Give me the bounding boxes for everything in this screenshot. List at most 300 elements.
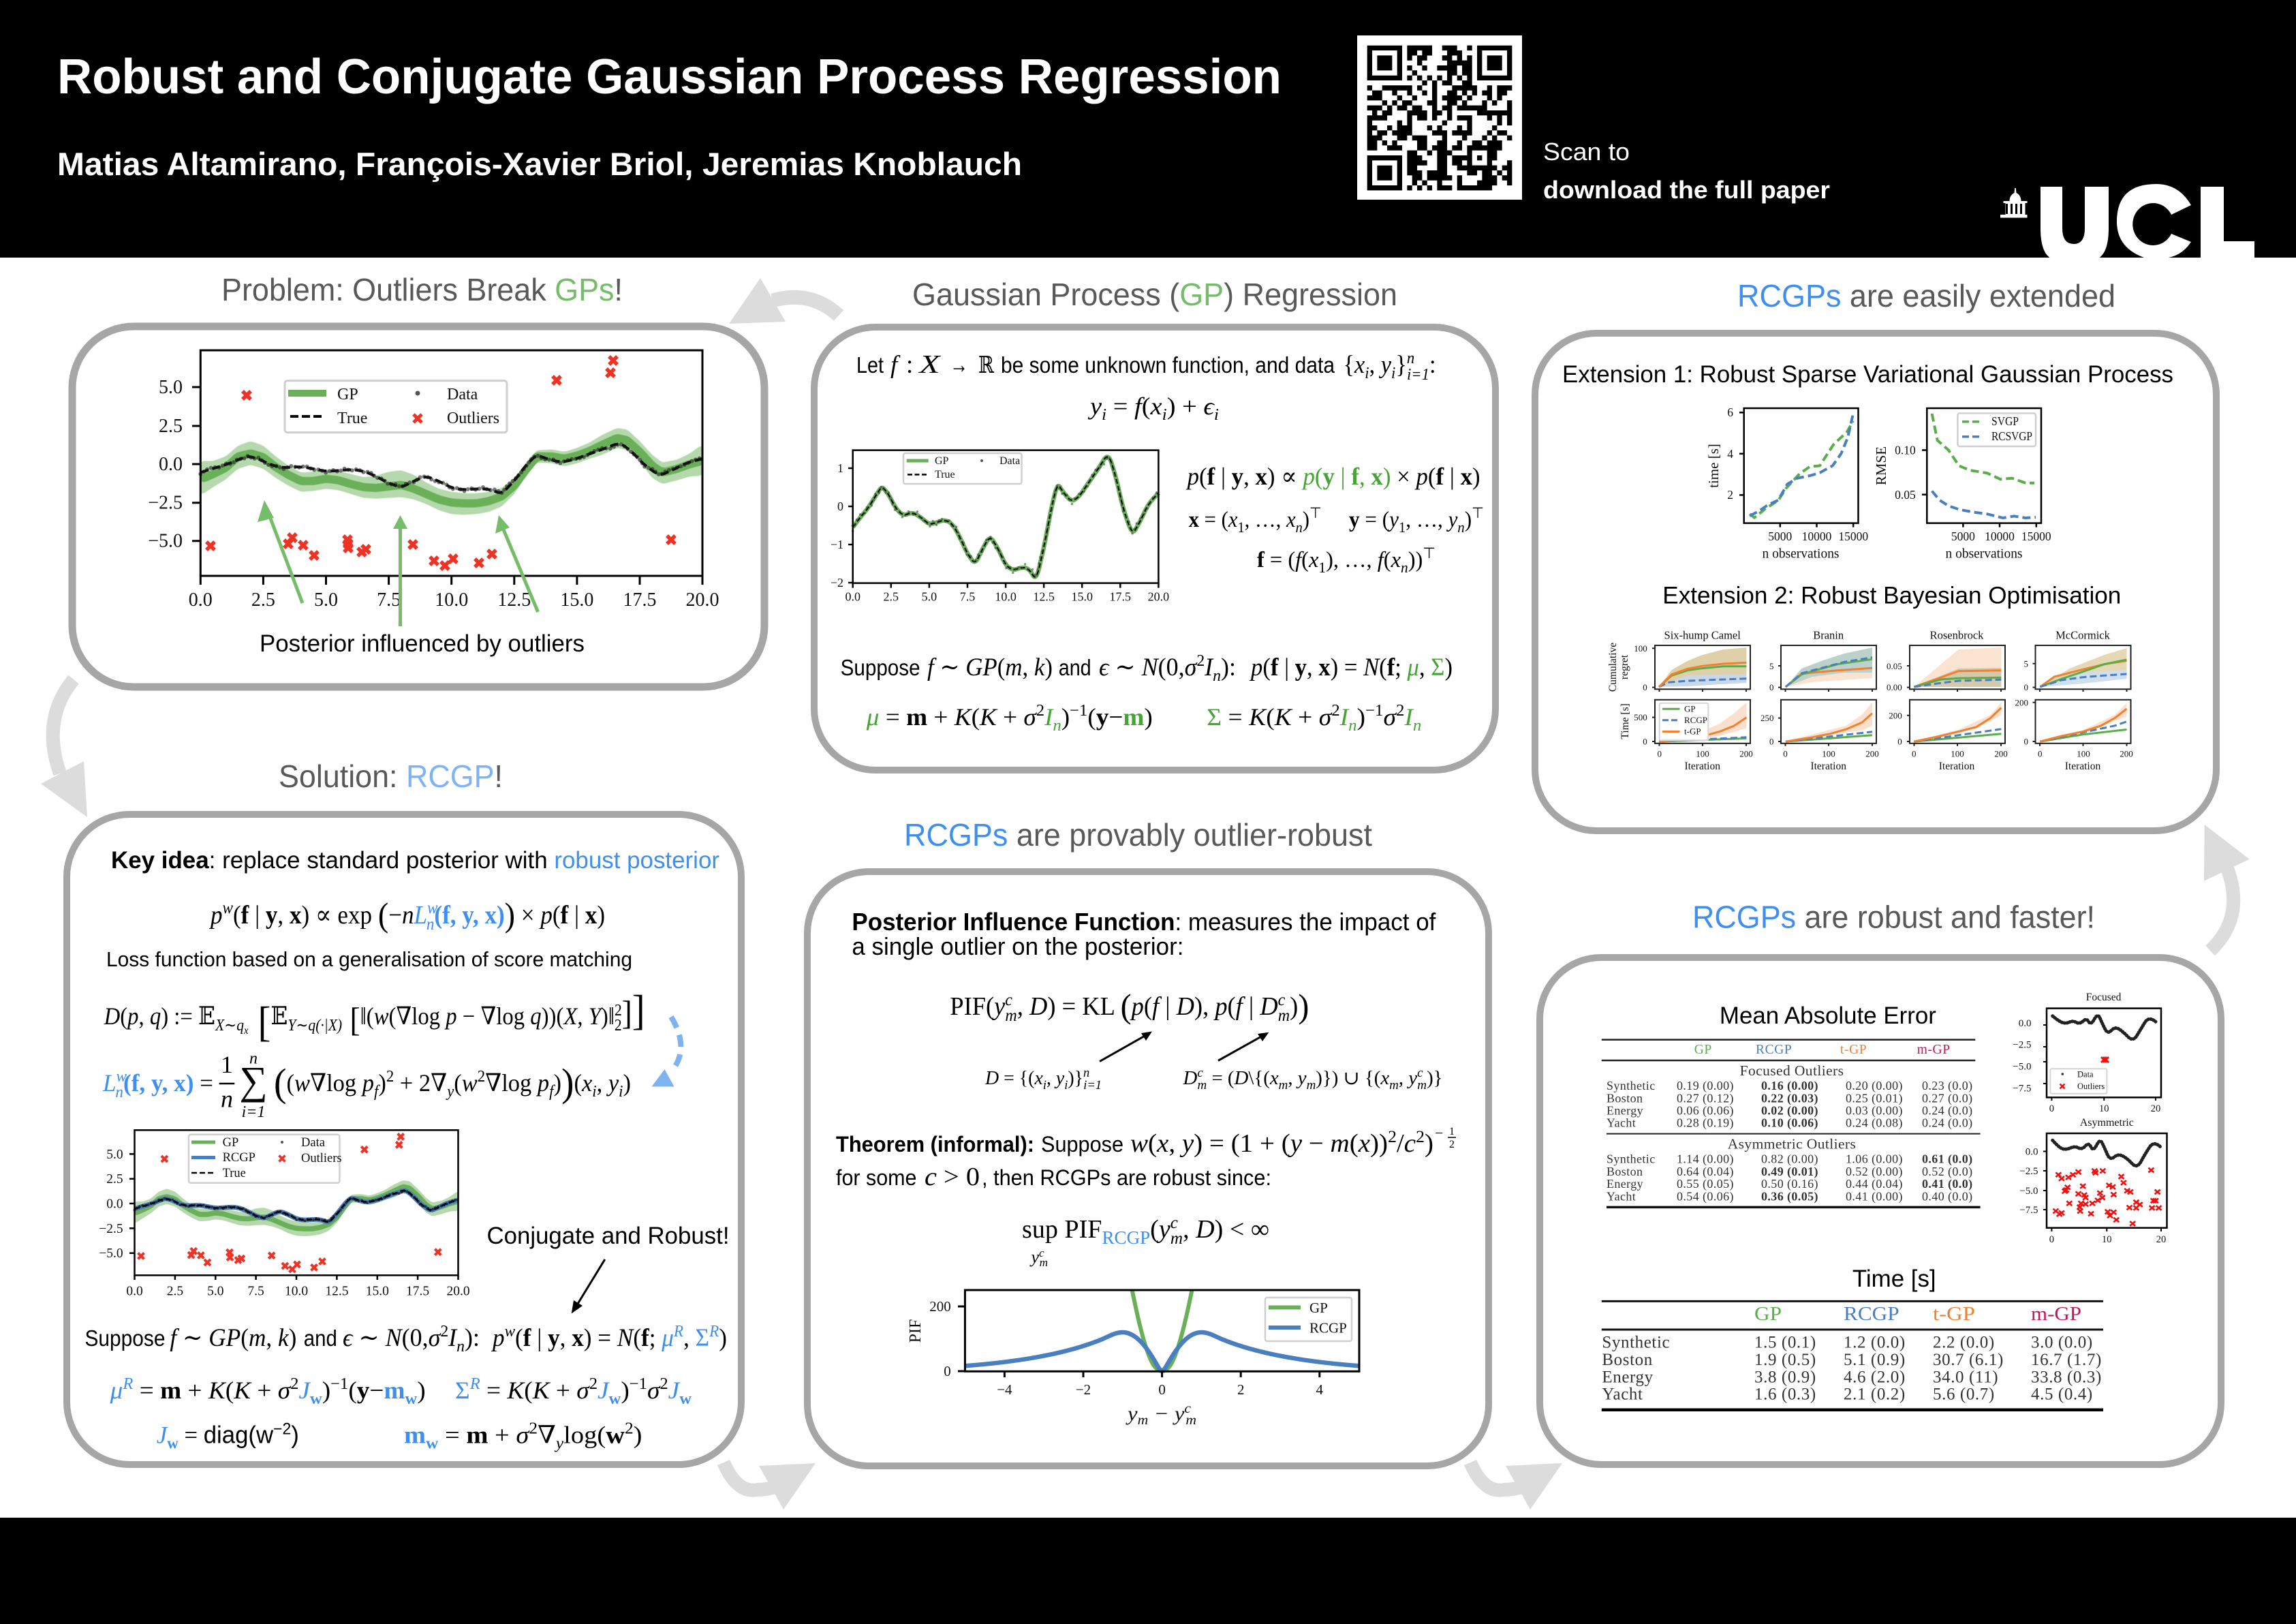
divergence equation: [ [249, 999, 270, 1045]
sigma R equation: = [480, 1377, 507, 1404]
chart: GP with outliers: 20.0 [685, 589, 719, 611]
theorem: c > 0 [925, 1163, 980, 1191]
chart: PIF: m [1185, 1413, 1196, 1428]
chart: focused outliers: −5.0 [2013, 1062, 2032, 1073]
MAE title: Mean Absolute Error [1720, 1002, 1936, 1029]
axis labels: 0 [1897, 736, 1902, 747]
arrow: faster to extensions [2204, 825, 2250, 951]
mu equation: I [1044, 703, 1055, 731]
chart: focused outliers: 10 [2099, 1103, 2109, 1114]
chart: PIF: y [1128, 1403, 1136, 1425]
mu equation: −1 [1070, 702, 1087, 720]
theorem: for some [836, 1165, 917, 1190]
axis labels: 0 [1643, 736, 1647, 747]
D c m definition: )}) ∪ {( [1316, 1068, 1380, 1089]
Branin time [1778, 700, 1876, 746]
axis labels: 100 [1634, 643, 1647, 654]
D definition: D = {(x [985, 1068, 1043, 1089]
setup sentence: X [918, 350, 942, 379]
sigma R equation: 2 [660, 1375, 668, 1393]
table: mean absolute error: 0.24 (0.0) [1922, 1116, 1973, 1130]
PIF equation: c [1005, 991, 1012, 1009]
posterior statement: and [1059, 655, 1091, 680]
callout: conjugate and robust: Conjugate and Robust! [486, 1223, 729, 1249]
chart: focused outliers: −7.5 [2013, 1084, 2032, 1094]
theorem [836, 1124, 1456, 1191]
observation model: = [1106, 393, 1134, 420]
legend: Outliers [2077, 1082, 2105, 1091]
divergence equation: D(p, q) := 𝔼 [104, 1002, 221, 1030]
table: mean absolute error: 0.50 (0.16) [1761, 1177, 1818, 1191]
sigma R equation: σ [647, 1377, 661, 1404]
chart: asymmetric outliers: 10 [2102, 1234, 2112, 1245]
chart: RMSE vs n: 0.10 [1895, 443, 1916, 457]
chart: RMSE vs n: 5000 [1951, 530, 1975, 543]
m w equation: ∇ [538, 1422, 556, 1449]
legend: GP [223, 1136, 238, 1150]
table: mean absolute error: Boston [1607, 1092, 1643, 1105]
sigma R equation: 2 [589, 1375, 598, 1393]
chart: time vs n: 4 [1727, 447, 1733, 461]
robust posterior equation: ( [378, 895, 388, 934]
loss equation: (f, y, x) [123, 1069, 193, 1097]
conjugacy statement: R [709, 1322, 719, 1340]
chart: GP with outliers: 5.0 [159, 377, 183, 398]
supremum statement: sup PIF [1022, 1215, 1102, 1244]
axis labels: 5 [1769, 661, 1774, 671]
D c m definition: c [1417, 1066, 1423, 1079]
chart: GP fit: 5.0 [922, 590, 937, 604]
D definition: y [1054, 1068, 1065, 1089]
table: time: 2.2 (0.0) [1933, 1333, 1995, 1351]
loss equation: w∇log p [294, 1069, 375, 1097]
setup sentence: {x [1344, 351, 1365, 379]
table: mean absolute error: 0.44 (0.04) [1846, 1177, 1903, 1191]
chart: GP fit: −2 [831, 576, 843, 589]
sigma equation: I [1339, 703, 1350, 731]
table: mean absolute error: 0.54 (0.06) [1677, 1189, 1734, 1204]
chart: asymmetric outliers: 0 [2049, 1234, 2054, 1245]
D c m definition: = ( [1207, 1068, 1235, 1089]
table: time: 33.8 (0.3) [2031, 1368, 2102, 1386]
x vector: ) [1303, 508, 1309, 532]
conjugacy statement: ): [465, 1324, 480, 1352]
posterior statement [841, 652, 1453, 685]
chart: focused outliers [2013, 992, 2161, 1114]
loss equation: w [117, 1068, 127, 1086]
loss equation: ∇log [485, 1069, 538, 1097]
PIF equation: (f | D), p(f | D [1144, 992, 1279, 1021]
chart: GP vs RCGP: 10.0 [285, 1285, 308, 1299]
m w equation: = [438, 1422, 466, 1449]
sigma equation: 2 [1396, 702, 1404, 720]
axis labels: 5 [2023, 658, 2028, 669]
y vector: n [1457, 519, 1465, 536]
chart: GP fit: 17.5 [1110, 590, 1131, 604]
sigma R equation: ) [621, 1377, 630, 1404]
legend [1660, 703, 1708, 740]
chart: time vs n: 15000 [1838, 530, 1868, 543]
table: time: 1.5 (0.1) [1754, 1333, 1816, 1351]
heading: provably robust: RCGPs are provably outlier-robust [904, 817, 1372, 853]
chart: RMSE vs n: 15000 [2021, 530, 2051, 543]
D c m definition: D\{(x [1235, 1068, 1278, 1089]
panel: GP regression [814, 277, 1495, 770]
divergence equation: X∼q [215, 1017, 244, 1035]
table: time: 30.7 (6.1) [1933, 1351, 2004, 1369]
mu R equation: 2 [290, 1375, 298, 1393]
theorem: c [1404, 1129, 1416, 1158]
legend: RCGP [1684, 715, 1707, 725]
J w equation: diag(w [204, 1420, 274, 1449]
chart: asymmetric outliers: Asymmetric [2080, 1117, 2134, 1129]
chart: GP vs RCGP: −5.0 [99, 1246, 123, 1261]
key idea: Key idea: replace standard posterior with robust posterior [111, 847, 719, 874]
chart: GP with outliers: 10.0 [435, 589, 468, 611]
theorem: Suppose [1041, 1132, 1123, 1156]
D definition: i=1 [1083, 1078, 1102, 1092]
chart: GP with outliers: 0.0 [159, 454, 183, 475]
sigma R equation: Σ [455, 1377, 470, 1404]
legend: Data [2077, 1070, 2094, 1079]
axis labels: Iteration [1684, 761, 1720, 772]
robust posterior equation: (f, y, x) [434, 901, 505, 930]
axis labels: Iteration [1810, 761, 1846, 772]
D definition: , [1046, 1068, 1056, 1089]
authors: Matias Altamirano, François-Xavier Briol, Jeremias Knoblauch [57, 146, 1022, 182]
table: mean absolute error: 0.49 (0.01) [1761, 1165, 1818, 1179]
chart: RMSE vs n [1873, 408, 2051, 562]
divergence equation: 2 [615, 1002, 622, 1020]
setup sentence: , [1369, 351, 1381, 379]
setup sentence: n [1407, 349, 1414, 367]
PIF equation: c [1278, 991, 1285, 1009]
observation model: i [1214, 406, 1219, 424]
axis labels: 0.05 [1887, 661, 1902, 671]
D c m definition: m [1389, 1078, 1399, 1092]
chart: GP with outliers: 0.0 [189, 589, 213, 611]
chart: GP vs RCGP: 7.5 [247, 1285, 264, 1299]
divergence equation: ] [632, 987, 645, 1034]
loss equation: n [221, 1085, 233, 1112]
legend: True [337, 410, 367, 427]
mu equation: ( [1087, 703, 1096, 731]
chart: asymmetric outliers: −2.5 [2019, 1166, 2038, 1177]
setup sentence: i=1 [1407, 365, 1429, 384]
time title: Time [s] [1852, 1266, 1936, 1292]
theorem: ) [1425, 1129, 1433, 1158]
legend: Outliers [447, 410, 499, 427]
chart: PIF: 2 [1237, 1381, 1244, 1398]
observation model: i [1102, 406, 1106, 424]
loss equation: x [581, 1069, 592, 1097]
chart: GP vs RCGP: 20.0 [446, 1285, 470, 1299]
table: mean absolute error: 0.27 (0.0) [1922, 1092, 1973, 1106]
PIF equation: D) = KL [1029, 992, 1117, 1021]
table: mean absolute error: m-GP [1917, 1043, 1951, 1057]
scan caption: Scan to [1543, 138, 1630, 166]
axis labels: 100 [1822, 748, 1835, 759]
chart: PIF: 0 [1158, 1381, 1166, 1398]
supremum statement: , [1183, 1215, 1196, 1244]
D c m definition: c [1197, 1066, 1203, 1079]
legend: t-GP [1684, 726, 1701, 737]
y vector: 1 [1399, 519, 1406, 536]
table: mean absolute error: 0.20 (0.00) [1846, 1079, 1903, 1093]
table: time: RCGP [1844, 1304, 1899, 1325]
f vector: f = (f(x [1257, 548, 1319, 572]
Rosenbrock regret [1907, 645, 2005, 692]
table: time: Boston [1602, 1351, 1653, 1369]
m w equation: log( [563, 1422, 606, 1449]
panel: problem [72, 272, 764, 687]
divergence equation: 𝔼 [270, 1002, 288, 1030]
table: mean absolute error: 0.10 (0.06) [1761, 1116, 1818, 1130]
table: mean absolute error: Asymmetric Outliers [1728, 1135, 1856, 1152]
D c m definition: , [1288, 1068, 1298, 1089]
setup sentence: be some unknown function, and data [1001, 352, 1335, 378]
J w equation: = [179, 1422, 204, 1449]
chart: PIF: 4 [1316, 1381, 1324, 1398]
f vector: ), …, [1326, 548, 1378, 572]
chart: time vs n: 2 [1727, 488, 1733, 502]
chart: GP fit: 12.5 [1033, 590, 1055, 604]
observation model: f(x [1134, 393, 1162, 420]
table: time [1602, 1301, 2103, 1410]
conjugacy statement: f | y, x) = N(f; μ [523, 1324, 674, 1352]
axis labels: 0 [1657, 748, 1662, 759]
sigma R equation: w [679, 1390, 692, 1408]
chart: asymmetric outliers: −7.5 [2019, 1205, 2038, 1216]
chart: GP with outliers: 15.0 [560, 589, 593, 611]
table: mean absolute error: Yacht [1607, 1116, 1636, 1130]
mu R equation: μ [110, 1377, 123, 1404]
table: mean absolute error: 0.41 (0.0) [1922, 1177, 1973, 1191]
axis labels: regret [1619, 654, 1630, 679]
table: mean absolute error: 0.03 (0.00) [1846, 1104, 1903, 1118]
table: mean absolute error: 1.06 (0.00) [1846, 1152, 1903, 1166]
arrow: provably robust to faster [1470, 1462, 1562, 1510]
divergence equation: [ [342, 1000, 360, 1039]
m w equation: m [404, 1422, 426, 1449]
axis labels: 500 [1634, 712, 1647, 722]
McCormick time [2033, 700, 2131, 746]
legend: True [223, 1167, 246, 1180]
mu R equation: ( [348, 1377, 357, 1404]
supremum statement: m [1170, 1229, 1183, 1248]
table: time: 2.1 (0.2) [1844, 1385, 1906, 1404]
chart: GP vs RCGP: 5.0 [207, 1285, 223, 1299]
table: time: 1.6 (0.3) [1754, 1385, 1816, 1404]
heading: problem: Problem: Outliers Break GPs! [221, 272, 623, 307]
theorem: w(x, y) = (1 + (y − m(x)) [1130, 1129, 1387, 1158]
axis labels: 0 [2038, 748, 2043, 759]
table: mean absolute error: Focused Outliers [1740, 1062, 1844, 1079]
legend: GP [1309, 1300, 1328, 1316]
J w equation: −2 [273, 1420, 291, 1438]
robust posterior equation: p(f | x) [540, 901, 606, 930]
loss equation: ( [454, 1069, 462, 1097]
chart: GP with outliers: −2.5 [148, 492, 183, 514]
x vector: x = (x [1189, 508, 1238, 532]
conjugacy statement: n [456, 1337, 465, 1355]
chart: GP fit: 20.0 [1148, 590, 1169, 604]
table: mean absolute error: 0.82 (0.00) [1761, 1152, 1818, 1166]
table: mean absolute error: Boston [1607, 1165, 1643, 1178]
divergence equation: x [243, 1025, 249, 1037]
loss equation: i [619, 1083, 623, 1101]
m w equation: 2 [625, 1420, 634, 1438]
D c m definition: D [1182, 1068, 1197, 1089]
x vector: x [1286, 508, 1296, 532]
D c m definition: m [1198, 1078, 1207, 1092]
chart: focused outliers: −2.5 [2013, 1040, 2032, 1051]
chart: PIF: −2 [1076, 1381, 1091, 1398]
legend [189, 1135, 342, 1183]
axis labels: 0.00 [1887, 682, 1902, 692]
plot titles: Six-hump Camel [1664, 628, 1741, 641]
legend [903, 453, 1022, 484]
axis labels: 200 [1889, 710, 1902, 721]
divergence equation: 2 [615, 1017, 622, 1035]
chart: RMSE vs n: n observations [1946, 547, 2023, 562]
chart: time vs n: 5000 [1768, 530, 1793, 543]
legend [285, 381, 507, 433]
theorem: 1 [1449, 1126, 1455, 1137]
m w equation: y [555, 1435, 564, 1453]
arrow: blue dashed [651, 1017, 681, 1086]
loss equation: i [592, 1083, 597, 1101]
m w equation: ) [634, 1422, 642, 1449]
loss equation: ( [274, 1060, 287, 1105]
heading: GP regression: Gaussian Process (GP) Regression [912, 277, 1397, 312]
loss equation: + 2∇ [394, 1069, 447, 1097]
chart: GP fit: −1 [831, 538, 843, 551]
robust posterior equation: f | y, x) ∝ exp [241, 901, 378, 930]
setup sentence: i [1365, 364, 1369, 382]
chart: RMSE vs n: 0.05 [1895, 488, 1916, 502]
m w equation: 2 [529, 1420, 538, 1438]
observation model: y [1088, 393, 1102, 420]
loss equation: p [536, 1069, 549, 1097]
extension 1 heading: Extension 1: Robust Sparse Variational Gaussian Process [1562, 361, 2173, 388]
panel: provably robust [807, 817, 1489, 1466]
robust posterior equation: ( [233, 901, 241, 930]
loss equation: y [606, 1069, 619, 1097]
supremum statement: c [1039, 1246, 1044, 1259]
table: mean absolute error: 0.06 (0.06) [1677, 1104, 1734, 1118]
table: mean absolute error: Synthetic [1607, 1152, 1656, 1165]
conjugacy statement: ( [515, 1324, 523, 1352]
conjugacy statement: I [448, 1324, 458, 1352]
table: mean absolute error: 0.24 (0.08) [1846, 1116, 1903, 1130]
sigma equation: I [1403, 703, 1414, 731]
D definition: i [1043, 1078, 1046, 1092]
table: time: 34.0 (11) [1933, 1368, 1998, 1386]
scan caption [1543, 138, 1830, 204]
chart: GP vs RCGP: 2.5 [106, 1172, 123, 1186]
setup sentence: f [890, 351, 901, 379]
sigma R equation: J [668, 1377, 681, 1404]
D c m definition: x [1380, 1068, 1390, 1089]
axis labels: 200 [1739, 748, 1753, 759]
posterior statement: Suppose [841, 655, 920, 680]
loss equation: f [374, 1083, 381, 1101]
table: time: Yacht [1602, 1385, 1643, 1404]
legend: RCGP [1309, 1319, 1347, 1336]
table: time: 16.7 (1.7) [2031, 1351, 2102, 1369]
sigma R equation: −1 [630, 1375, 647, 1393]
posterior statement: f ∼ GP(m, k) [927, 654, 1053, 681]
axis labels: 250 [1760, 713, 1774, 723]
loss function text: Loss function based on a generalisation of score matching [106, 947, 632, 971]
chart: GP vs RCGP: 0.0 [106, 1197, 123, 1212]
loss equation: n [249, 1050, 258, 1068]
table: mean absolute error: 0.61 (0.0) [1922, 1152, 1973, 1166]
posterior statement: I [1204, 654, 1214, 681]
mu R equation: w [310, 1390, 323, 1408]
axis labels: 0 [1769, 682, 1774, 692]
setup sentence: : [1429, 351, 1436, 379]
mu equation: n [1053, 717, 1061, 735]
mu equation: y−m) [1096, 703, 1152, 731]
loss equation: i=1 [242, 1103, 265, 1121]
panel: extensions [1535, 278, 2216, 831]
robust posterior equation: × [515, 901, 540, 930]
outliers [138, 1133, 441, 1272]
theorem: 2 [1416, 1128, 1425, 1146]
legend [1265, 1298, 1352, 1341]
PIF equation: ( [1121, 987, 1132, 1025]
header band [0, 0, 2296, 258]
axis labels: 0 [1643, 682, 1647, 692]
chart: time vs n: time [s] [1705, 444, 1722, 488]
sigma equation: Σ = K(K + σ [1207, 703, 1331, 731]
supremum statement: y [1031, 1247, 1039, 1267]
x vector: , …, [1245, 508, 1286, 532]
D c m definition: , [1399, 1068, 1408, 1089]
theorem: Theorem (informal): [836, 1132, 1034, 1156]
plot titles: McCormick [2055, 628, 2111, 641]
chart: GP with outliers: 2.5 [159, 416, 183, 437]
observation model: i [1162, 406, 1167, 424]
chart: GP with outliers: 2.5 [251, 589, 275, 611]
chart: GP fit: 0.0 [845, 590, 860, 604]
m w equation: w [426, 1435, 439, 1453]
table: mean absolute error: 0.25 (0.01) [1846, 1092, 1903, 1106]
D definition: i [1064, 1078, 1068, 1092]
plot titles: Rosenbrock [1930, 628, 1984, 641]
axis labels: Cumulative [1607, 643, 1619, 692]
callout: conjugate and robust [486, 1223, 729, 1314]
chart: PIF: c [1184, 1401, 1191, 1416]
table: mean absolute error: 0.52 (0.00) [1846, 1165, 1903, 1179]
chart: GP vs RCGP: 0.0 [126, 1285, 143, 1299]
chart: focused outliers: Focused [2086, 992, 2122, 1003]
sigma R equation: K(K + σ [507, 1377, 589, 1404]
Bayes rule equation: p(f | y, x) ∝ p(y | f, x) × p(f | x) [1185, 463, 1480, 490]
mu R equation: m + K(K + σ [160, 1377, 290, 1404]
PIF definition: Posterior Influence Function: measures the impact of [852, 908, 1436, 936]
conjugacy statement: p [491, 1324, 505, 1352]
sigma equation: 2 [1331, 702, 1340, 720]
setup sentence [856, 349, 1436, 384]
chart: focused outliers: 0.0 [2019, 1018, 2032, 1029]
panel: solution [67, 759, 741, 1465]
panel: robust and faster [1540, 900, 2221, 1465]
loss equation: = [200, 1069, 214, 1097]
chart: time vs n: 6 [1727, 405, 1733, 419]
